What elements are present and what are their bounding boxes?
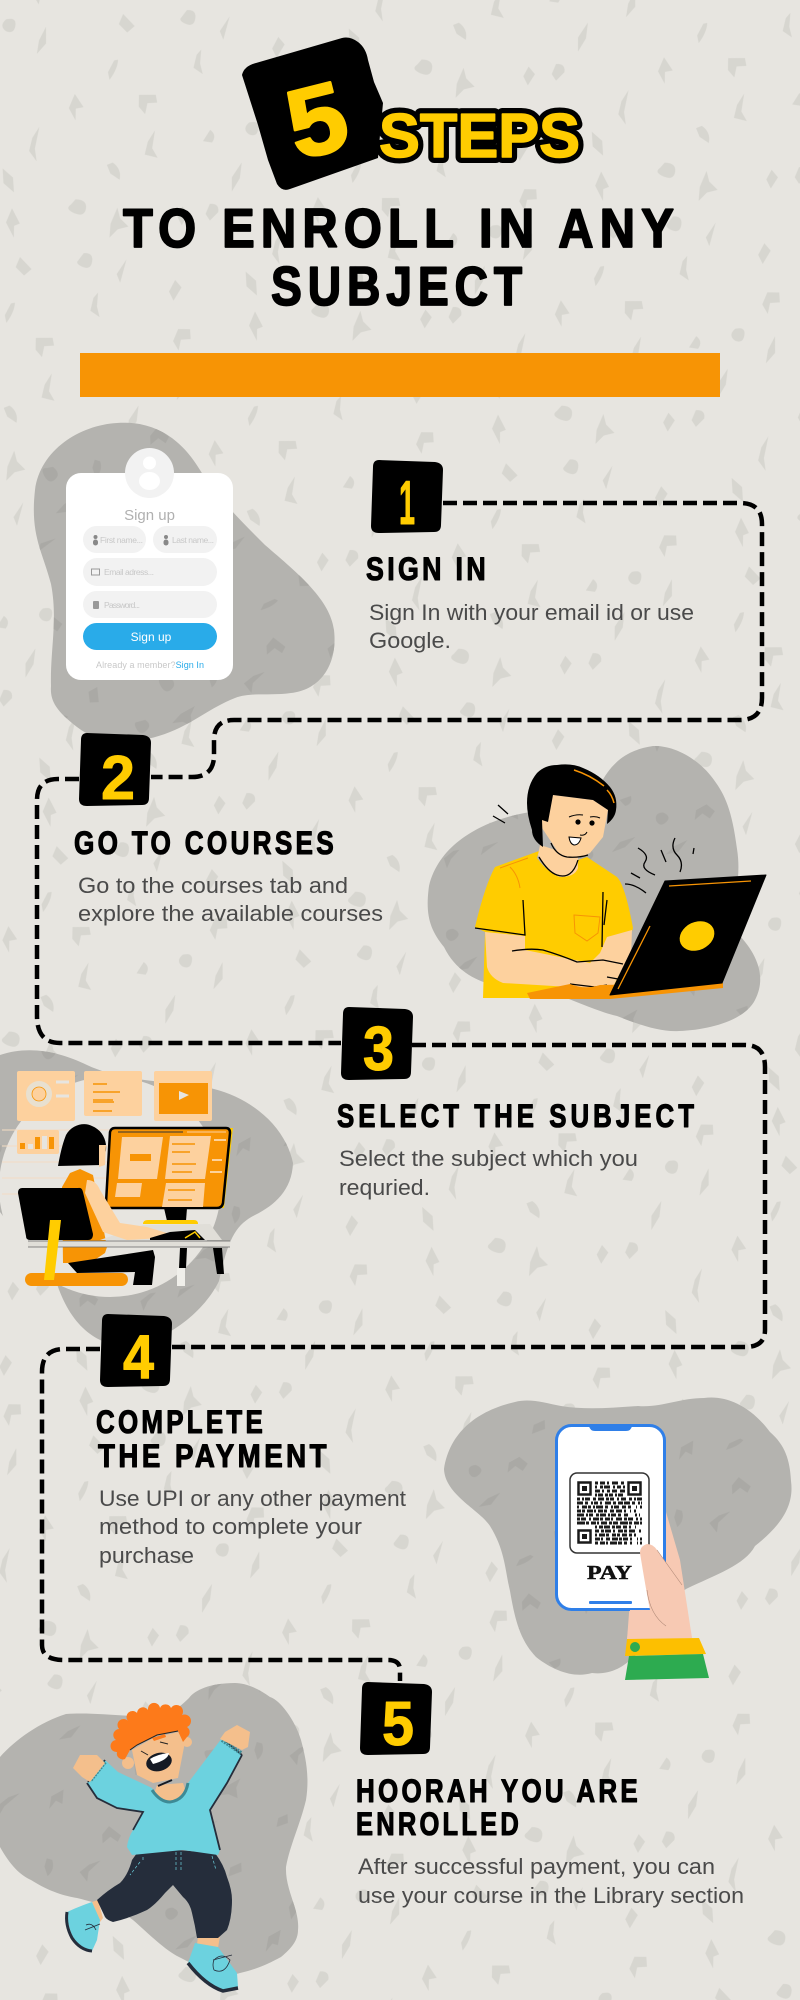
orange banner (80, 353, 720, 397)
label: PAY: PAY (587, 1562, 633, 1584)
text: explore the available courses (78, 901, 383, 926)
text: Go to the courses tab and (78, 873, 348, 898)
text: method to complete your (99, 1514, 362, 1539)
text: use your course in the Library section (358, 1883, 744, 1908)
heading: HOORAH YOU ARE (356, 1773, 641, 1809)
face and neck (153, 1783, 187, 1802)
heading: SIGN IN (366, 551, 489, 587)
number tile 3 (341, 1007, 413, 1084)
blob (34, 423, 335, 742)
panel: step 4 complete the payment (96, 1314, 792, 1680)
heading: THE PAYMENT (98, 1438, 330, 1474)
text: requried. (339, 1175, 430, 1200)
sign up form card: Sign up (124, 507, 175, 524)
text: Google. (369, 628, 451, 653)
number tile 1: 1 (399, 469, 415, 538)
sign up form card (66, 448, 233, 680)
dashed connector path (37, 503, 765, 1681)
heading: COMPLETE (96, 1404, 266, 1440)
number tile 3: 3 (363, 1015, 394, 1084)
number tile 5 (360, 1682, 432, 1759)
text (78, 873, 383, 926)
badge: number 5 (242, 38, 383, 190)
sign up form card: Password... (104, 600, 140, 610)
panel: step 2 go to courses (74, 733, 766, 1031)
number tile 2 (79, 733, 151, 813)
heading: subject: SUBJECT (271, 255, 528, 317)
sign up form card: Email adress... (104, 567, 154, 577)
number tile 4: 4 (123, 1323, 154, 1392)
blob (0, 1683, 307, 1974)
illustration: man with laptop (475, 764, 766, 999)
badge: number 5: 5 (275, 60, 358, 180)
panel: step 1 sign in (34, 423, 694, 742)
text: purchase (99, 1543, 194, 1568)
heading: SELECT THE SUBJECT (337, 1098, 698, 1134)
illustration: cheering boy (67, 1703, 250, 1992)
panel: step 5 hoorah (0, 1682, 744, 1992)
blob (428, 746, 760, 1031)
panel: step 3 select the subject (0, 1007, 698, 1347)
QR code (577, 1482, 642, 1543)
text: Use UPI or any other payment (99, 1486, 406, 1511)
text: Select the subject which you (339, 1146, 638, 1171)
sign up form card: Sign up (131, 630, 172, 644)
text: After successful payment, you can (358, 1854, 715, 1879)
heading (96, 1404, 330, 1474)
text (358, 1854, 744, 1908)
heading: STEPS: STEPS (379, 102, 580, 171)
heading: GO TO COURSES (74, 825, 337, 861)
illustration: woman at computer (0, 1071, 233, 1297)
text: Sign In with your email id or use (369, 600, 694, 625)
heading (356, 1773, 641, 1842)
hand thumb (627, 1544, 692, 1640)
heading: STEPS: STEPS (379, 102, 580, 171)
number tile 1 (371, 460, 443, 538)
title (123, 38, 680, 317)
heading: to enroll in any: TO ENROLL IN ANY (123, 197, 680, 259)
sign up form card: Already a member?Sign In (96, 660, 204, 670)
number tile 5: 5 (382, 1690, 414, 1759)
blob (0, 1050, 293, 1347)
sign up form card: Last name... (172, 535, 214, 545)
number tile 4 (100, 1314, 172, 1392)
illustration: phone with QR (556, 1426, 709, 1680)
text (99, 1486, 406, 1568)
text (339, 1146, 638, 1200)
blob (444, 1397, 792, 1675)
heading: ENROLLED (356, 1806, 522, 1842)
text (369, 600, 694, 653)
number tile 2: 2 (101, 744, 135, 813)
sign up form card: First name... (100, 535, 143, 545)
